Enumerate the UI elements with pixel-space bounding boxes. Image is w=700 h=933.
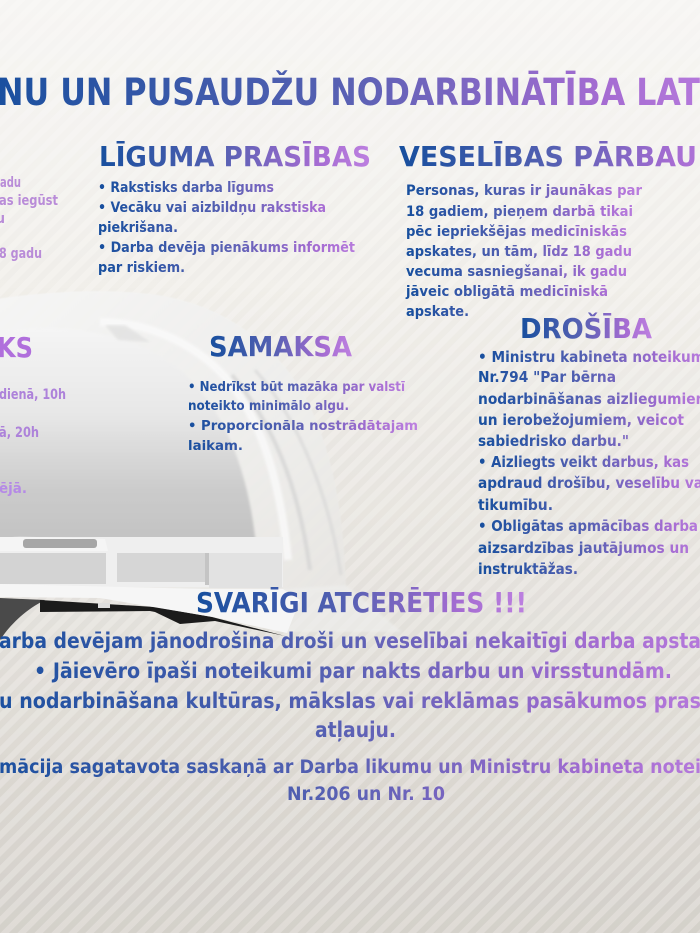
icon: white safety helmet	[0, 291, 402, 640]
panel: left clipped text	[0, 175, 58, 262]
text block: safety rules: un ierobežojumiem, veicot	[478, 411, 684, 429]
panel: līguma prasības	[98, 140, 371, 276]
text block: clipped hours: dienā, 10h	[0, 387, 66, 403]
text block: medical checks: apskates, un tām, līdz 18 gadu	[406, 244, 632, 260]
text block: pay rules: laikam.	[188, 438, 243, 454]
helmet brim right fade	[213, 585, 402, 632]
text block: medical checks: jāveic obligātā medicīniskā	[405, 284, 608, 300]
text block: safety rules: instruktāžas.	[478, 560, 578, 578]
panel: veselības pārbaude	[399, 140, 697, 320]
text block: legal source note	[0, 757, 700, 805]
text block: contract requirements: • Vecāku vai aizbildņu rakstiska	[98, 200, 326, 216]
text block: medical checks: pēc iepriekšējas medicīniskās	[406, 224, 627, 240]
heading: veselības pārbaude: VESELĪBAS PĀRBAU	[399, 140, 697, 173]
text block: key reminders: atļauju.	[315, 718, 396, 742]
text block: key reminders	[0, 629, 700, 742]
text block: safety rules: sabiedrisko darbu."	[478, 432, 629, 450]
text block: medical checks	[405, 183, 642, 320]
text block: contract requirements: • Darba devēja pienākums informēt	[98, 240, 355, 256]
text block: medical checks: apskate.	[406, 304, 469, 320]
text block: medical checks: 18 gadiem, pieņem darbā tikai	[406, 204, 633, 220]
text block: pay rules	[188, 379, 418, 454]
text block: pay rules: noteikto minimālo algu.	[188, 398, 349, 414]
heading: līguma prasības: LĪGUMA PRASĪBAS	[99, 140, 371, 173]
text block: safety rules: tikumību.	[478, 496, 553, 514]
text block: pay rules: • Proporcionāla nostrādātajam	[188, 418, 418, 434]
heading: samaksa: SAMAKSA	[209, 331, 353, 363]
text block: legal source note: Nr.206 un Nr. 10	[287, 784, 445, 805]
text block: clipped hours: ā, 20h	[0, 425, 39, 441]
helmet black underside	[0, 598, 285, 640]
heading: drošība: DROŠĪBA	[520, 311, 653, 345]
panel: samaksa	[188, 331, 418, 454]
panel: svarīgi atcerēties	[0, 586, 700, 805]
text block: clipped hours	[0, 387, 66, 497]
heading: svarīgi atcerēties: SVARĪGI ATCERĒTIES !!!	[196, 586, 527, 619]
panel: drošība	[478, 311, 700, 578]
helmet brim	[0, 584, 300, 633]
panel: left clipped text: 8 gadu	[0, 246, 42, 262]
text block: contract requirements: piekrišana.	[98, 220, 178, 236]
text block: pay rules: • Nedrīkst būt mazāka par valstī	[188, 379, 405, 395]
text block: contract requirements: • Rakstisks darba līgums	[98, 180, 274, 196]
text block: safety rules: Nr.794 "Par bērna	[478, 368, 616, 386]
text block: contract requirements	[98, 180, 355, 276]
text block: safety rules	[478, 348, 700, 578]
panel: left clipped text: as iegūst	[0, 193, 58, 209]
text block: medical checks: Personas, kuras ir jaunākas par	[406, 183, 642, 199]
helmet outer shell	[0, 291, 346, 592]
helmet visor block	[0, 537, 283, 588]
helmet inner dome	[0, 328, 256, 545]
text block: contract requirements: par riskiem.	[98, 260, 185, 276]
panel: left clipped text: adu	[0, 175, 21, 191]
panel: left clipped working time	[0, 332, 66, 497]
text block: medical checks: vecuma sasniegšanai, ik gadu	[406, 264, 627, 280]
